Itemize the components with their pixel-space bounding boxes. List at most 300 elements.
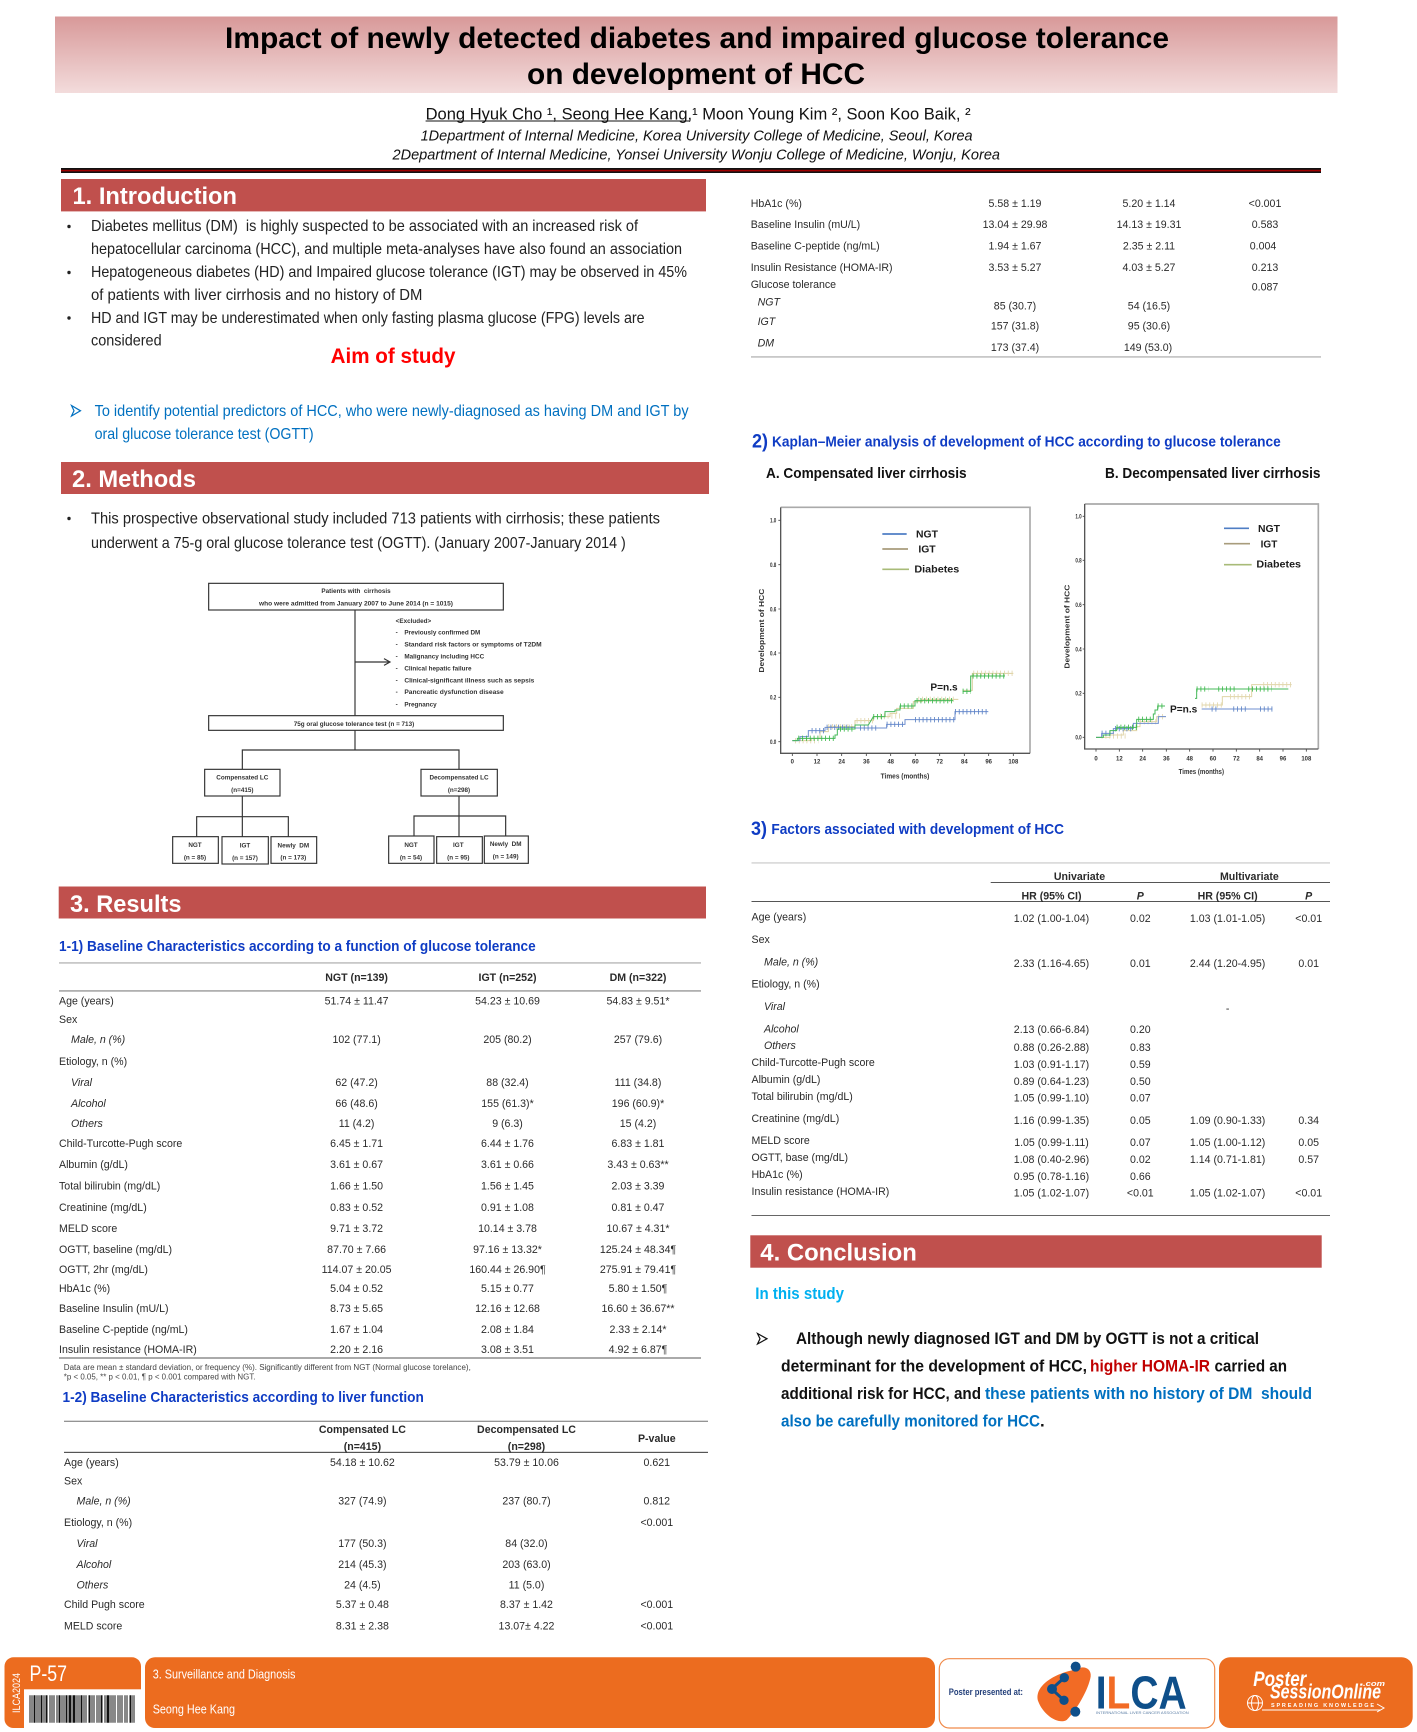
row: male: Male, n (%) xyxy=(76,1496,131,1508)
table footnote: Data are mean ± standard deviation, or frequency (%). Significantly different from NGT (Normal glucose torelance), xyxy=(64,1363,471,1372)
row: glucose tolerance: Glucose tolerance xyxy=(751,279,836,291)
y axis title: Development of HCC xyxy=(757,588,766,673)
row: ogtt baseline: 87.70 ± 7.66 xyxy=(327,1244,386,1256)
x axis title: Times (months) xyxy=(1179,767,1224,776)
row: creatinine: Creatinine (mg/dL) xyxy=(59,1202,147,1214)
table header row xyxy=(319,1424,676,1453)
row: male xyxy=(71,1034,662,1046)
row: etiology: Etiology, n (%) xyxy=(64,1517,132,1529)
flowchart: patient selection: IGT xyxy=(453,842,464,849)
icon: ILCA mark xyxy=(1038,1662,1091,1721)
y axis labels: 0.0 xyxy=(1075,736,1082,742)
row: total bilirubin: 1.66 ± 1.50 xyxy=(330,1180,383,1192)
row: child-turcotte-pugh xyxy=(752,1057,1151,1071)
row: hba1c: 0.66 xyxy=(1130,1171,1151,1183)
row: ogtt baseline: OGTT, baseline (mg/dL) xyxy=(59,1244,172,1256)
flowchart: patient selection: Malignancy including HCC xyxy=(404,654,485,661)
row: glucose tolerance: 0.087 xyxy=(1252,282,1278,294)
flowchart: patient selection: NGT xyxy=(188,842,202,849)
legend: NGT xyxy=(1258,524,1280,535)
row: male: 102 (77.1) xyxy=(332,1034,381,1046)
y axis labels xyxy=(1075,515,1082,742)
row: child pugh: <0.001 xyxy=(640,1599,673,1611)
row: sex: Sex xyxy=(64,1476,83,1488)
header divider xyxy=(61,168,1321,173)
row: hba1c xyxy=(752,1169,1151,1183)
row: creatinine xyxy=(752,1113,1319,1127)
x axis labels: 72 xyxy=(936,760,944,766)
table header row: NGT (n=139) xyxy=(325,972,388,984)
text block: aim statement xyxy=(72,403,689,443)
row: albumin: 0.50 xyxy=(1130,1076,1151,1088)
row: ogtt 2hr: 160.44 ± 26.90¶ xyxy=(469,1264,546,1276)
row: age: 0.02 xyxy=(1130,913,1151,925)
row: albumin: 3.43 ± 0.63** xyxy=(607,1159,669,1171)
table header: Univariate xyxy=(1054,871,1105,883)
y axis labels: 0.4 xyxy=(770,651,777,657)
y axis labels: 0.0 xyxy=(770,740,777,746)
row: meld xyxy=(64,1620,673,1632)
row: insulin resistance xyxy=(752,1186,1322,1200)
y axis labels: 0.2 xyxy=(1075,692,1082,698)
table header row: IGT (n=252) xyxy=(478,972,536,984)
table header row xyxy=(325,972,666,984)
flowchart: patient selection: - xyxy=(396,701,398,708)
row: c-peptide: 0.004 xyxy=(1250,240,1276,252)
title banner: on development of HCC xyxy=(527,58,865,91)
row: etiology: Etiology, n (%) xyxy=(59,1056,127,1068)
x axis labels: 36 xyxy=(1163,756,1170,762)
row: dm: DM xyxy=(758,338,774,350)
table continuation: liver function (right column) xyxy=(751,198,1321,358)
text block: introduction bullets: Hepatogeneous diabetes (HD) and Impaired glucose tolerance (IGT) may be observed in 45% xyxy=(91,264,687,281)
row: creatinine: 0.83 ± 0.52 xyxy=(330,1202,383,1214)
row: age: 53.79 ± 10.06 xyxy=(494,1457,559,1469)
flowchart: patient selection: - xyxy=(396,642,398,649)
row: insulin resistance: 0.213 xyxy=(1252,262,1278,274)
row: hba1c xyxy=(751,198,1281,210)
text block: introduction bullets: considered xyxy=(91,332,162,350)
y axis title: Development of HCC xyxy=(1063,584,1072,669)
row: male: 2.44 (1.20-4.95) xyxy=(1190,958,1265,970)
curve: NGT xyxy=(792,712,988,741)
table header row: Decompensated LC xyxy=(477,1424,576,1436)
text block: conclusion statement: carried an xyxy=(1214,1356,1287,1376)
table: baseline characteristics by glucose tolerance xyxy=(59,962,701,1358)
row: insulin resistance: 4.92 ± 6.87¶ xyxy=(609,1344,668,1356)
row: total bilirubin: 1.56 ± 1.45 xyxy=(481,1180,534,1192)
row: total bilirubin: 2.03 ± 3.39 xyxy=(612,1180,665,1192)
text: In this study: In this study xyxy=(755,1285,845,1303)
text block: introduction bullets: of patients with liver cirrhosis and no history of DM xyxy=(91,287,422,304)
row: baseline insulin: Baseline Insulin (mU/L) xyxy=(59,1303,169,1315)
y axis labels: 0.6 xyxy=(770,607,777,613)
x axis labels: 108 xyxy=(1008,760,1019,766)
row: male: 0.01 xyxy=(1130,958,1151,970)
flowchart: patient selection: Pregnancy xyxy=(404,701,437,708)
flowchart: patient selection: Previously confirmed DM xyxy=(404,630,480,637)
row: c-peptide xyxy=(59,1324,667,1336)
row: child pugh: 8.37 ± 1.42 xyxy=(500,1599,553,1611)
text block: conclusion statement: . xyxy=(1040,1412,1045,1430)
x axis labels: 60 xyxy=(1210,756,1217,762)
legend: NGT xyxy=(916,529,938,540)
row: ogtt baseline: 97.16 ± 13.32* xyxy=(473,1244,542,1256)
table header: Multivariate xyxy=(1220,871,1279,883)
table header xyxy=(1021,871,1313,902)
row: alcohol: 214 (45.3) xyxy=(338,1559,387,1571)
row: hba1c: 5.20 ± 1.14 xyxy=(1123,198,1176,210)
legend xyxy=(1224,524,1301,570)
x axis labels: 60 xyxy=(912,760,919,766)
heading: Aim of study: Aim of study xyxy=(331,345,456,368)
table: factors associated with HCC xyxy=(752,862,1330,1216)
row: male: 0.01 xyxy=(1298,958,1319,970)
row: meld xyxy=(59,1223,669,1235)
row: others: Others xyxy=(71,1118,103,1130)
row: others: 15 (4.2) xyxy=(620,1118,656,1130)
row: male: 327 (74.9) xyxy=(338,1496,387,1508)
panel: results xyxy=(59,198,1330,1632)
row: insulin resistance: 3.53 ± 5.27 xyxy=(989,262,1042,274)
heading: 4. Conclusion: 4. Conclusion xyxy=(760,1240,917,1267)
row: insulin resistance xyxy=(59,1344,668,1356)
x axis labels: 12 xyxy=(814,760,821,766)
row: ngt: 85 (30.7) xyxy=(994,300,1036,312)
row: dm xyxy=(758,338,1172,354)
heading: 2. Methods xyxy=(61,462,709,494)
flowchart: patient selection: (n = 54) xyxy=(400,854,422,861)
row: baseline insulin: 8.73 ± 5.65 xyxy=(330,1303,383,1315)
row: age: 54.23 ± 10.69 xyxy=(475,996,540,1008)
row: baseline insulin: 16.60 ± 36.67** xyxy=(602,1303,674,1315)
row: others: 24 (4.5) xyxy=(344,1580,381,1592)
x axis title: Times (months) xyxy=(881,771,930,780)
flowchart: patient selection: (n = 157) xyxy=(232,855,258,862)
row: albumin: 3.61 ± 0.66 xyxy=(481,1159,534,1171)
row: albumin xyxy=(59,1159,669,1171)
row: c-peptide: 1.94 ± 1.67 xyxy=(989,240,1042,252)
row: c-peptide: 2.08 ± 1.84 xyxy=(481,1324,534,1336)
row: meld: <0.001 xyxy=(640,1620,673,1632)
text block: introduction bullets: HD and IGT may be underestimated when only fasting plasma glucose (FPG) levels are xyxy=(91,310,645,327)
heading: 3. Results: 3. Results xyxy=(70,891,182,918)
row: ogtt base: 1.14 (0.71-1.81) xyxy=(1190,1154,1265,1166)
x axis labels: 108 xyxy=(1301,756,1312,762)
row: age: 54.18 ± 10.62 xyxy=(330,1457,395,1469)
row: hba1c: 5.80 ± 1.50¶ xyxy=(609,1283,668,1295)
row: viral: Viral xyxy=(764,1001,786,1013)
row: sex: Sex xyxy=(59,1014,78,1026)
text block: conclusion statement: additional risk for HCC, and xyxy=(781,1384,981,1403)
footer: PosterSessionOnline logo: SPREADING KNOWLEDGE xyxy=(1271,1703,1374,1709)
row: child pugh: Child Pugh score xyxy=(64,1599,145,1611)
row: male: Male, n (%) xyxy=(764,956,818,968)
heading: 3. Results xyxy=(59,886,706,918)
row: ogtt baseline xyxy=(59,1244,676,1256)
row: c-peptide: 1.67 ± 1.04 xyxy=(330,1324,383,1336)
text: poster number: P-57 xyxy=(30,1661,67,1686)
row: creatinine: 1.16 (0.99-1.35) xyxy=(1014,1115,1089,1127)
legend: Diabetes xyxy=(914,565,959,576)
flowchart: patient selection: Newly DM xyxy=(278,843,309,850)
x axis labels: 24 xyxy=(1139,756,1147,762)
row: ngt xyxy=(758,296,1170,312)
row: meld: MELD score xyxy=(64,1620,122,1632)
legend xyxy=(882,529,959,576)
row: others: Others xyxy=(76,1580,109,1592)
row: ogtt base xyxy=(752,1152,1319,1166)
y axis labels: 0.2 xyxy=(770,696,777,702)
curve: diabetes xyxy=(1096,689,1288,737)
footer: ILCA logo card xyxy=(939,1659,1215,1728)
barcode xyxy=(30,1695,135,1723)
row: meld: MELD score xyxy=(752,1135,810,1147)
panel: conclusion xyxy=(750,1235,1322,1430)
row: alcohol: 0.20 xyxy=(1130,1024,1151,1036)
row: alcohol xyxy=(763,1024,1151,1036)
row: baseline insulin: Baseline Insulin (mU/L) xyxy=(751,219,860,231)
row: total bilirubin xyxy=(752,1091,1151,1104)
row: others: 11 (4.2) xyxy=(339,1118,374,1130)
flowchart: patient selection: Clinical hepatic failure xyxy=(404,665,472,672)
row: child-turcotte-pugh: Child-Turcotte-Pugh score xyxy=(752,1057,875,1069)
row: baseline insulin: 0.583 xyxy=(1252,219,1278,231)
row: alcohol: 2.13 (0.66-6.84) xyxy=(1014,1024,1089,1036)
x axis labels: 0 xyxy=(1094,756,1098,762)
text: ILCA2024: ILCA2024 xyxy=(11,1673,23,1713)
row: child-turcotte-pugh xyxy=(59,1138,665,1150)
row: insulin resistance: 2.20 ± 2.16 xyxy=(330,1344,383,1356)
heading: 3) factors xyxy=(751,819,1064,840)
row: insulin resistance: Insulin Resistance (HOMA-IR) xyxy=(751,262,893,274)
row: albumin: 0.89 (0.64-1.23) xyxy=(1014,1076,1089,1088)
row: meld: 10.14 ± 3.78 xyxy=(478,1223,537,1235)
row: c-peptide: Baseline C-peptide (ng/mL) xyxy=(751,240,880,252)
text block: introduction bullets: hepatocellular carcinoma (HCC), and multiple meta-analyses have also found an association xyxy=(91,241,682,258)
x axis labels: 12 xyxy=(1116,756,1123,762)
row: insulin resistance: 1.05 (1.02-1.07) xyxy=(1190,1188,1265,1200)
text block: aim statement: To identify potential predictors of HCC, who were newly-diagnosed as having DM and IGT by xyxy=(95,403,689,420)
row: ogtt base: 1.08 (0.40-2.96) xyxy=(1014,1154,1089,1166)
row: alcohol: 155 (61.3)* xyxy=(481,1098,534,1110)
row: insulin resistance: 4.03 ± 5.27 xyxy=(1123,262,1176,274)
row: creatinine xyxy=(59,1202,665,1214)
legend: IGT xyxy=(918,545,936,556)
x axis labels: 96 xyxy=(1280,756,1287,762)
row: others: 11 (5.0) xyxy=(509,1580,544,1592)
row: alcohol xyxy=(76,1559,551,1571)
row: male xyxy=(764,956,1319,970)
y axis labels: 0.6 xyxy=(1075,603,1082,609)
flowchart: patient selection: - xyxy=(396,665,398,672)
row: alcohol xyxy=(70,1098,664,1110)
row: igt: IGT xyxy=(758,316,777,328)
row: viral: Viral xyxy=(71,1077,93,1089)
row: alcohol: Alcohol xyxy=(76,1559,112,1571)
x axis labels: 96 xyxy=(985,760,993,766)
text block: conclusion statement: Although newly diagnosed IGT and DM by OGTT is not a critical xyxy=(796,1329,1259,1348)
row: sex: Sex xyxy=(752,934,770,946)
row: insulin resistance: Insulin resistance (HOMA-IR) xyxy=(752,1186,889,1198)
title banner: Impact of newly detected diabetes and impaired glucose tolerance xyxy=(225,22,1169,55)
y axis labels: 1.0 xyxy=(770,519,777,525)
row: ogtt base: OGTT, base (mg/dL) xyxy=(752,1152,848,1164)
row: hba1c: 5.58 ± 1.19 xyxy=(989,198,1042,210)
flowchart: patient selection: (n = 85) xyxy=(184,854,206,861)
row: insulin resistance: 3.08 ± 3.51 xyxy=(481,1344,534,1356)
footer: PosterSessionOnline logo: SessionOnline xyxy=(1270,1682,1381,1704)
x axis labels: 48 xyxy=(887,760,895,766)
row: dm: 173 (37.4) xyxy=(991,342,1039,354)
row: albumin xyxy=(752,1074,1151,1088)
row: ogtt base: 0.02 xyxy=(1130,1154,1151,1166)
row: hba1c: 0.95 (0.78-1.16) xyxy=(1014,1171,1089,1183)
row: meld: 9.71 ± 3.72 xyxy=(330,1223,383,1235)
row: others xyxy=(76,1580,544,1592)
legend: Diabetes xyxy=(1256,559,1301,570)
x axis labels: 0 xyxy=(791,760,795,766)
row: meld: 0.05 xyxy=(1298,1137,1319,1149)
row: hba1c: HbA1c (%) xyxy=(752,1169,803,1181)
row: baseline insulin xyxy=(751,219,1278,231)
row: child-turcotte-pugh: 0.59 xyxy=(1130,1059,1151,1071)
row: ngt: NGT xyxy=(758,296,781,308)
x axis labels: 48 xyxy=(1186,756,1194,762)
flowchart: patient selection: 75g oral glucose tolerance test (n = 713) xyxy=(294,721,414,728)
row: igt: 95 (30.6) xyxy=(1128,320,1170,332)
row: hba1c: HbA1c (%) xyxy=(751,198,802,210)
authors and affiliations: Dong Hyuk Cho ¹, Seong Hee Kang,¹ Moon Young Kim ², Soon Koo Baik, ² xyxy=(426,106,971,124)
footer: poster id tab xyxy=(4,1657,141,1728)
table header row: DM (n=322) xyxy=(610,972,666,984)
row: albumin: Albumin (g/dL) xyxy=(752,1074,820,1086)
row: age: 51.74 ± 11.47 xyxy=(325,996,389,1008)
row: total bilirubin xyxy=(59,1180,665,1192)
row: insulin resistance: Insulin resistance (HOMA-IR) xyxy=(59,1344,197,1356)
row: alcohol: Alcohol xyxy=(70,1098,106,1110)
row: alcohol: 66 (48.6) xyxy=(335,1098,378,1110)
heading: 3) factors: Factors associated with development of HCC xyxy=(771,822,1064,838)
row: insulin resistance: 1.05 (1.02-1.07) xyxy=(1014,1188,1089,1200)
row: total bilirubin: 1.05 (0.99-1.10) xyxy=(1014,1092,1089,1104)
row: ogtt 2hr: 114.07 ± 20.05 xyxy=(322,1264,392,1276)
row: ogtt baseline: 125.24 ± 48.34¶ xyxy=(600,1244,676,1256)
row: creatinine: 0.91 ± 1.08 xyxy=(481,1202,534,1214)
row: albumin: 3.61 ± 0.67 xyxy=(330,1159,383,1171)
row: male: 257 (79.6) xyxy=(614,1034,662,1046)
footer: PosterSessionOnline logo: Poster xyxy=(1253,1668,1308,1691)
heading: 1. Introduction: 1. Introduction xyxy=(72,183,237,210)
flowchart: patient selection: (n=415) xyxy=(231,787,254,794)
text block: methods description: underwent a 75-g oral glucose tolerance test (OGTT). (January 2007-January 2014 ) xyxy=(91,535,626,552)
row: viral: Viral xyxy=(76,1538,98,1550)
row: meld: 1.05 (1.00-1.12) xyxy=(1190,1137,1265,1149)
row: male xyxy=(76,1496,670,1508)
row: c-peptide: Baseline C-peptide (ng/mL) xyxy=(59,1324,188,1336)
row: age: <0.01 xyxy=(1295,913,1322,925)
row: child-turcotte-pugh: 6.44 ± 1.76 xyxy=(481,1138,534,1150)
row: insulin resistance: <0.01 xyxy=(1295,1188,1322,1200)
row: others xyxy=(71,1118,656,1130)
flowchart: patient selection: (n = 173) xyxy=(280,854,306,861)
row: meld: 1.05 (0.99-1.11) xyxy=(1014,1137,1089,1149)
row: ogtt base: 0.57 xyxy=(1298,1154,1319,1166)
row: age: Age (years) xyxy=(59,996,114,1008)
row: etiology: <0.001 xyxy=(640,1517,673,1529)
row: child-turcotte-pugh: 1.03 (0.91-1.17) xyxy=(1014,1059,1089,1071)
footer: topic and presenter: Seong Hee Kang xyxy=(153,1702,235,1716)
title banner xyxy=(55,16,1338,93)
flowchart: patient selection: NGT xyxy=(404,842,418,849)
text block: methods description xyxy=(67,510,660,552)
row: child pugh: 5.37 ± 0.48 xyxy=(336,1599,389,1611)
flowchart: patient selection: Decompensated LC xyxy=(429,775,489,782)
row: glucose tolerance xyxy=(751,279,1278,294)
curve: diabetes xyxy=(792,676,1005,741)
row: meld: MELD score xyxy=(59,1223,117,1235)
heading: 2) kaplan-meier: Kaplan–Meier analysis of development of HCC according to glucose tolerance xyxy=(772,434,1281,450)
row: creatinine: 0.81 ± 0.47 xyxy=(612,1202,665,1214)
row: hba1c: 5.04 ± 0.52 xyxy=(330,1283,383,1295)
row: total bilirubin: Total bilirubin (mg/dL) xyxy=(752,1091,853,1103)
flowchart: patient selection xyxy=(173,583,542,864)
heading: 3) factors: 3) xyxy=(751,819,767,840)
row: etiology: Etiology, n (%) xyxy=(752,978,820,990)
authors and affiliations: 1Department of Internal Medicine, Korea University College of Medicine, Seoul, Korea xyxy=(421,128,973,144)
text: poster presented at: Poster presented at: xyxy=(949,1687,1023,1697)
row: meld: 13.07± 4.22 xyxy=(499,1620,555,1632)
text block: conclusion statement: determinant for the development of HCC, xyxy=(781,1356,1087,1376)
x axis labels: 36 xyxy=(863,760,870,766)
text block: conclusion statement: also be carefully monitored for HCC xyxy=(781,1412,1040,1430)
row: viral xyxy=(71,1077,661,1089)
row: male: Male, n (%) xyxy=(71,1034,125,1046)
heading: 2) kaplan-meier: 2) xyxy=(752,432,768,452)
row: ngt: 54 (16.5) xyxy=(1128,300,1170,312)
row: c-peptide: 2.33 ± 2.14* xyxy=(609,1324,667,1336)
row: igt xyxy=(758,316,1170,332)
row: age: Age (years) xyxy=(64,1457,119,1469)
row: age xyxy=(752,912,1322,925)
row: dm: 149 (53.0) xyxy=(1124,342,1172,354)
row: meld: 10.67 ± 4.31* xyxy=(607,1223,669,1235)
panel: introduction xyxy=(61,179,706,443)
row: viral: 177 (50.3) xyxy=(338,1538,387,1550)
text block: conclusion statement xyxy=(758,1329,1312,1430)
row: male: 2.33 (1.16-4.65) xyxy=(1014,958,1089,970)
heading: 1-1 baseline characteristics: 1-1) Baseline Characteristics according to a function of glucose tolerance xyxy=(59,939,536,955)
row: age: 1.02 (1.00-1.04) xyxy=(1014,913,1089,925)
row: baseline insulin: 12.16 ± 12.68 xyxy=(475,1303,540,1315)
row: male: 237 (80.7) xyxy=(502,1496,551,1508)
row: creatinine: 0.05 xyxy=(1130,1115,1151,1127)
row: viral xyxy=(764,1001,1230,1015)
legend: IGT xyxy=(1261,539,1277,550)
row: viral: 111 (34.8) xyxy=(615,1077,661,1089)
p value: P=n.s xyxy=(930,682,958,693)
x axis labels: 72 xyxy=(1233,756,1240,762)
row: albumin: Albumin (g/dL) xyxy=(59,1159,128,1171)
x axis labels: 24 xyxy=(838,760,846,766)
footer: topic and presenter xyxy=(145,1657,935,1728)
table footnote xyxy=(64,1363,471,1382)
row: male: 0.812 xyxy=(644,1496,670,1508)
flowchart: patient selection: (n=298) xyxy=(448,787,470,794)
flowchart: patient selection: Compensated LC xyxy=(216,775,269,782)
row: baseline insulin xyxy=(59,1303,674,1315)
flowchart: patient selection: Patients with cirrhosis xyxy=(321,588,391,595)
